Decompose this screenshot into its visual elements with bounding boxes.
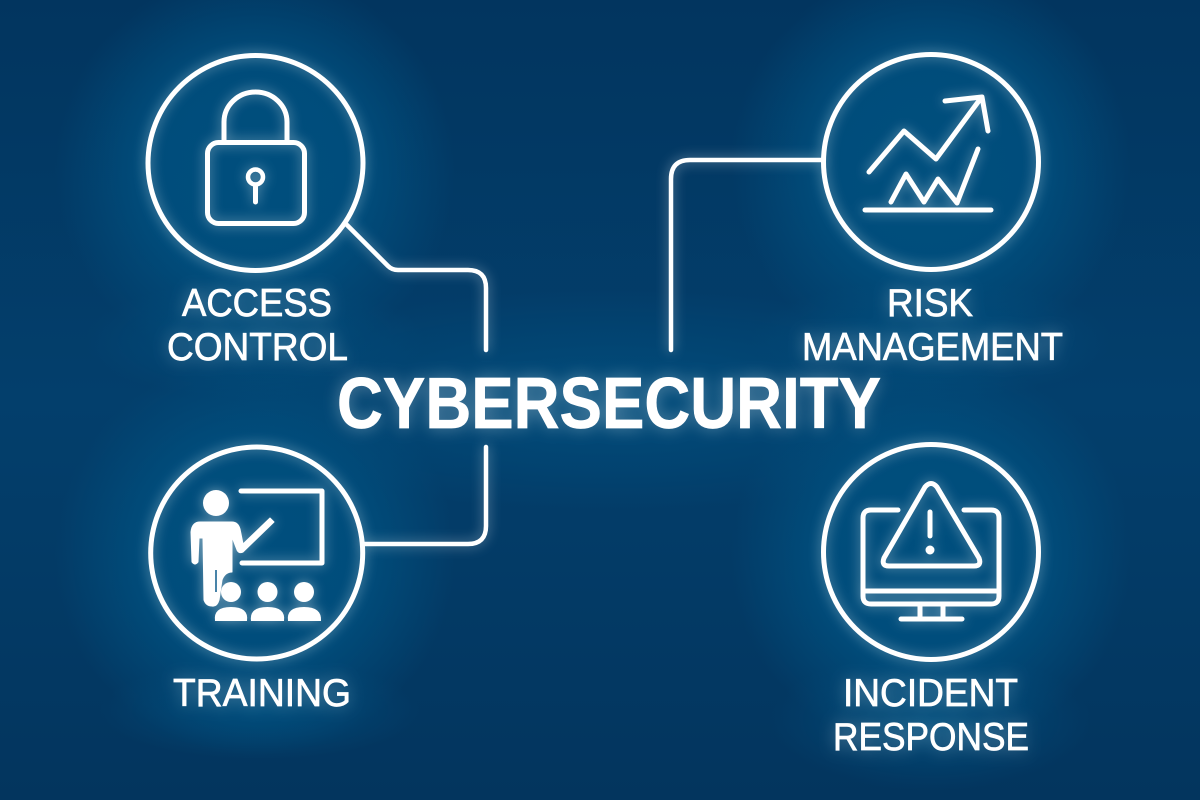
panel: training <box>151 447 363 715</box>
connector: training <box>364 447 486 544</box>
label: access control: ACCESS <box>182 282 332 325</box>
connector: risk management <box>671 160 821 350</box>
connector lines <box>347 160 821 544</box>
label: risk management <box>802 282 1063 369</box>
label: access control <box>167 282 348 369</box>
icon: monitor with warning triangle in circle <box>824 444 1038 660</box>
label: incident response <box>833 672 1029 759</box>
icon: trainer and audience in circle <box>151 447 363 659</box>
title: CYBERSECURITY <box>337 364 881 444</box>
label: incident response: RESPONSE <box>833 716 1029 759</box>
icon: padlock in circle <box>148 56 363 270</box>
label: training: TRAINING <box>173 672 351 715</box>
label: access control: CONTROL <box>167 326 348 369</box>
label: risk management: MANAGEMENT <box>802 326 1063 369</box>
icon: rising chart in circle <box>824 54 1038 270</box>
label: risk management: RISK <box>887 282 973 325</box>
panel: access control <box>148 56 363 369</box>
label: incident response: INCIDENT <box>843 672 1018 715</box>
connector: access control <box>347 225 486 350</box>
panel: incident response <box>824 444 1038 759</box>
panel: risk management <box>802 54 1063 369</box>
